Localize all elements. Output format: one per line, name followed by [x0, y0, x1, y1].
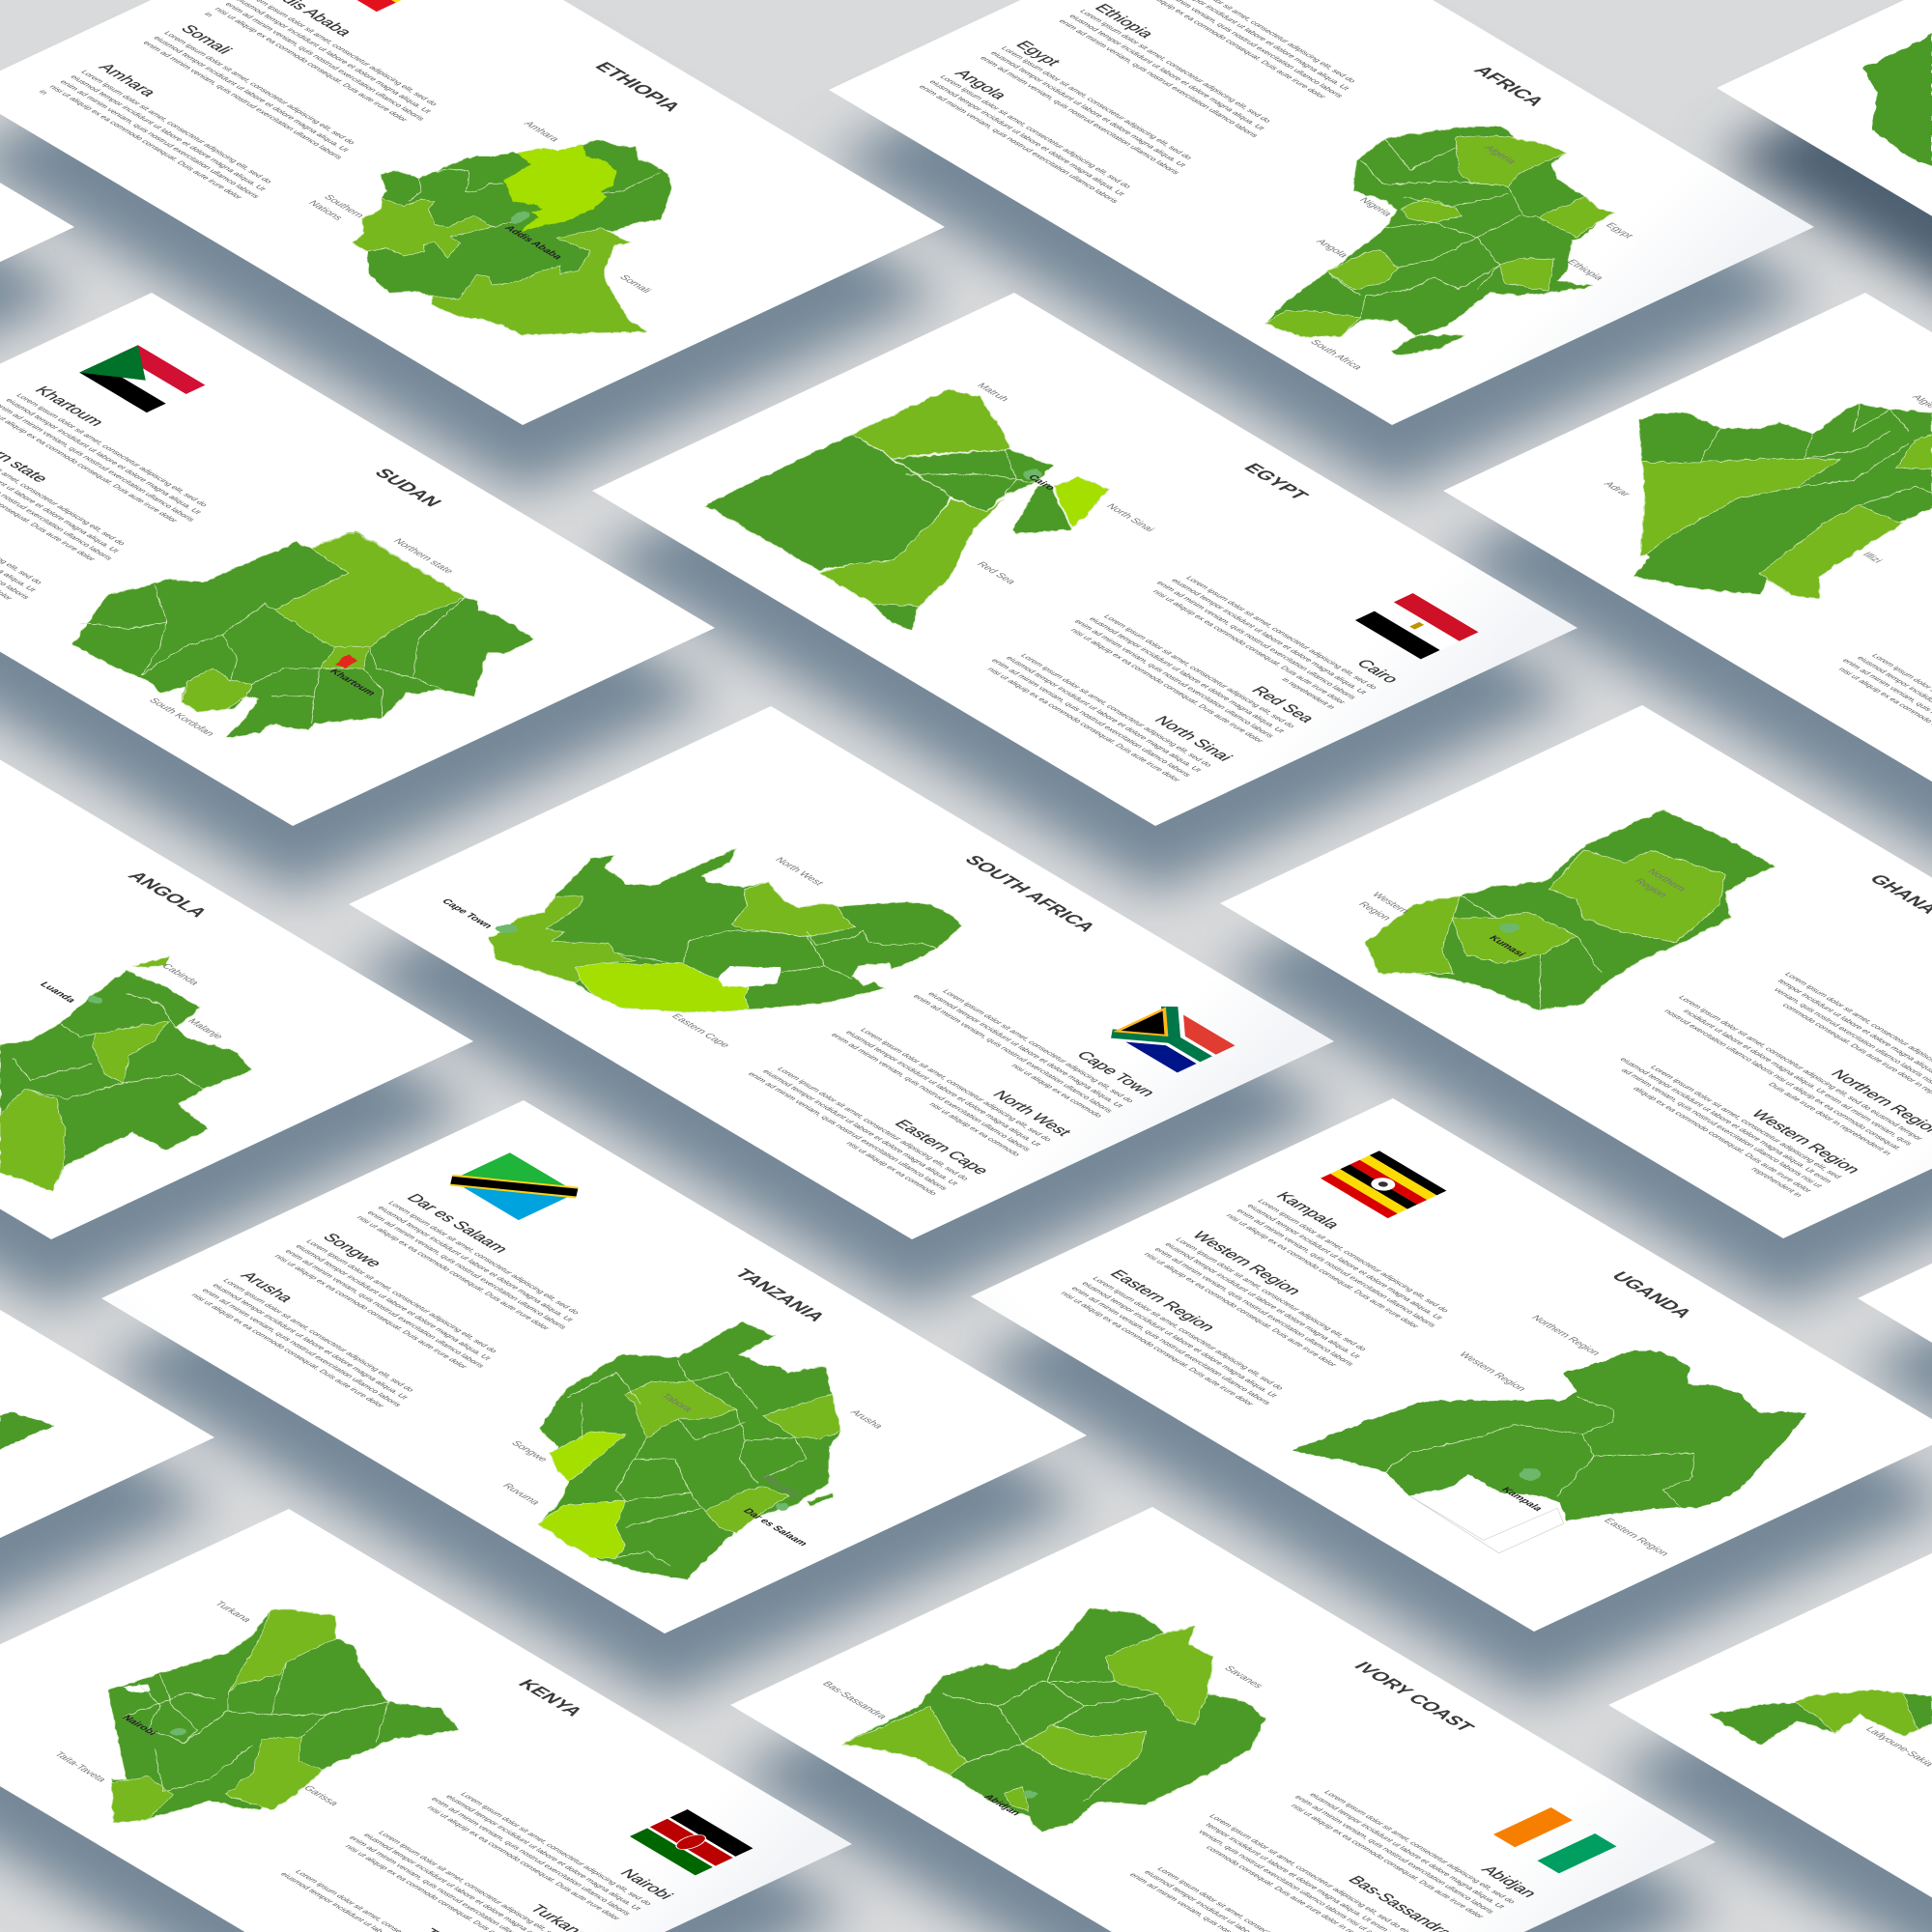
text: Africa: AFRICA: [1468, 64, 1548, 109]
map labels: Kenya: [51, 1601, 340, 1807]
text: Africa: [917, 0, 1548, 260]
panel: Ghana: [1220, 705, 1932, 1238]
map: Tanzania: [538, 1321, 841, 1579]
text: Ghana: [1528, 872, 1932, 1199]
text and flag: South Africa: Lorem ipsum dolor sit amet, consectetur adipiscing elit, sed do: [941, 988, 1136, 1104]
text and flag: Egypt: Lorem ipsum dolor sit amet, consectetur adipiscing elit, sed do: [1184, 575, 1379, 691]
text and flag: Kenya: Lorem ipsum dolor sit amet, consectetur adipiscing elit, sed do: [459, 1791, 654, 1907]
panel: partial slide top left: [0, 0, 74, 425]
map labels: South Africa: Eastern Cape: [668, 1013, 731, 1049]
text and flag: Uganda: UGANDA: [1606, 1269, 1696, 1321]
text and flag: Kenya: eiusmod tempor incididunt ut labore et dolore magna aliqua. Ut: [443, 1794, 644, 1912]
text and flag: Egypt: eiusmod tempor incididunt ut labore et dolore magna aliqua. Ut: [1169, 578, 1370, 696]
text: Ghana: Duis aute irure dolor in reprehenderit in: [1766, 1081, 1893, 1156]
map labels: Kenya: Garissa: [300, 1785, 340, 1807]
text: Africa: Lorem ipsum dolor sit amet, consectetur adipiscing elit, sed do: [938, 74, 1133, 189]
text and flag: Tanzania: nisi ut aliquip ex ea commodo consequat. Duis aute irure dolor: [355, 1215, 552, 1331]
text and flag: Ethiopia: Lorem ipsum dolor sit amet, consectetur adipiscing elit, sed do: [79, 70, 274, 185]
map labels: Angola: Malanje: [185, 1018, 225, 1040]
map: Ivory Coast: [842, 1608, 1265, 1833]
map: Ethiopia: [353, 139, 672, 335]
text and flag: Tanzania: TANZANIA: [729, 1266, 830, 1324]
text and flag: South Africa: Lorem ipsum dolor sit amet, consectetur adipiscing elit, sed do: [775, 1066, 971, 1181]
text: Algeria: [1830, 570, 1932, 783]
text and flag: Tanzania: eiusmod tempor incididunt ut labore et dolore magna aliqua. Ut: [376, 1205, 576, 1323]
text and flag: Tanzania: Lorem ipsum dolor sit amet, consectetur adipiscing elit, sed do: [221, 1278, 416, 1393]
map labels: Ethiopia: Somali: [616, 274, 653, 295]
text and flag: Kenya: KENYA: [513, 1677, 587, 1719]
text and flag: Ethiopia: in: [202, 12, 215, 18]
text: Ghana: incididunt ut labore et dolore magna aliqua. Ut enim ad minim veniam, quis: [1681, 1009, 1915, 1147]
text and flag: Tanzania: eiusmod tempor incididunt ut labore et dolore magna aliqua. Ut: [294, 1243, 494, 1362]
text and flag: Uganda: Kampala: [1272, 1190, 1345, 1231]
map: Uganda: [1293, 1351, 1807, 1520]
map labels: Ethiopia: Amhara: [521, 121, 561, 143]
text and flag: Uganda: Western Region: [1188, 1229, 1305, 1297]
map labels: Sudan: Northern state: [390, 538, 455, 575]
text and flag: Ivory Coast: IVORY COAST: [1349, 1660, 1479, 1734]
text and flag: Kenya: nisi ut aliquip ex ea commodo consequat. Duis aute irure dolor: [425, 1805, 623, 1921]
text: Africa: eiusmod tempor incididunt ut labore et dolore magna aliqua. Ut: [988, 50, 1189, 168]
text and flag: Ivory Coast: Abidjan: [1477, 1863, 1541, 1899]
text and flag: Tanzania: [189, 1136, 830, 1475]
text: Ghana: Western Region: [1747, 1108, 1864, 1176]
text: Africa: Angola: [951, 68, 1011, 101]
text and flag: Uganda: nisi ut aliquip ex ea commodo consequat. Duis aute irure dolor: [1059, 1291, 1256, 1406]
text and flag: Sudan: eiusmod tempor incididunt ut labore et dolore magna aliqua. Ut: [4, 397, 204, 516]
text and flag: South Africa: nisi ut aliquip ex ea commodo: [1009, 1063, 1104, 1119]
text and flag: South Africa: Eastern Cape: [891, 1118, 993, 1177]
map labels: Africa: Angola: [1313, 239, 1350, 259]
text and flag: Uganda: eiusmod tempor incididunt ut labore et dolore magna aliqua. Ut: [1080, 1281, 1280, 1399]
panel: Ethiopia: [0, 0, 945, 425]
text and flag: Ivory Coast: eiusmod tempor incididunt ut labore et dolore magna aliqua. Ut: [1307, 1792, 1508, 1910]
text and flag: South Africa: eiusmod tempor incididunt ut labore et dolore magna aliqua. Ut: [760, 1068, 961, 1186]
map labels: Uganda: Eastern Region: [1601, 1518, 1670, 1557]
map labels: Tanzania: Morogoro: [758, 1474, 806, 1500]
map: Ghana: [1365, 810, 1775, 1010]
text and flag: South Africa: enim ad minim veniam, quis nostrud exercitation ullamco laboris: [829, 1032, 1033, 1152]
panel: Angola: [0, 706, 473, 1239]
text and flag: South Africa: SOUTH AFRICA: [959, 853, 1100, 934]
text and flag: Egypt: EGYPT: [1238, 461, 1313, 502]
text and flag: Egypt: [909, 461, 1525, 784]
map labels: Algeria: Illizi: [1860, 552, 1884, 564]
text and flag: Kenya: enim ad minim veniam, quis nostrud exercitation ullamco laboris: [429, 1796, 633, 1917]
panel: South Africa: [349, 706, 1334, 1239]
map: Algeria: [1634, 404, 1932, 599]
text and flag: Ivory Coast: [1031, 1660, 1662, 1932]
panel: Ivory Coast: [730, 1507, 1716, 1932]
text and flag: Egypt: nisi ut aliquip ex ea commodo consequat. Duis aute irure dolor: [1068, 628, 1266, 744]
map labels: Angola: Luanda: [37, 981, 77, 1004]
text and flag: South Africa: North West: [988, 1089, 1076, 1138]
map labels: Ghana: Western: [1369, 892, 1411, 915]
panel: Kenya: [0, 1509, 852, 1932]
text: Africa: Lorem ipsum dolor sit amet, consectetur adipiscing elit, sed do: [1078, 9, 1273, 124]
text and flag: Uganda: Lorem ipsum dolor sit amet, consectetur adipiscing elit, sed do: [1091, 1276, 1286, 1391]
map: Africa: [1264, 127, 1613, 356]
text and flag: Ethiopia: eiusmod tempor incididunt ut labore et dolore magna aliqua. Ut: [152, 35, 352, 154]
map labels: Uganda: [1456, 1315, 1670, 1557]
text and flag: Tanzania: enim ad minim veniam, quis nostrud exercitation ullamco laboris: [200, 1288, 404, 1407]
map labels: Africa: [1307, 145, 1634, 371]
map labels: Ghana: Northern: [1644, 868, 1688, 893]
text and flag: Tanzania: Dar es Salaam: [403, 1192, 512, 1255]
lake outline: Uganda: [1409, 1496, 1564, 1553]
text and flag: Tanzania: nisi ut aliquip ex ea commodo consequat. Duis aute irure dolor: [272, 1253, 469, 1370]
text and flag: Uganda: Lorem ipsum dolor sit amet, consectetur adipiscing elit, sed do: [1256, 1198, 1451, 1314]
text and flag: Uganda: eiusmod tempor incididunt ut labore et dolore magna aliqua. Ut: [1163, 1241, 1363, 1360]
panel: partial slide top right: [1717, 0, 1932, 423]
map labels: Angola: [37, 963, 225, 1040]
text and flag: Kenya: Nairobi: [616, 1867, 677, 1901]
text: Ghana: aliquip ex ea commodo consequat. Duis aute irure dolor: [1631, 1086, 1814, 1194]
text and flag: Uganda: nisi ut aliquip ex ea commodo consequat. Duis aute irure dolor: [1224, 1213, 1421, 1329]
text and flag: Tanzania: enim ad minim veniam, quis nostrud exercitation ullamco laboris: [365, 1209, 569, 1330]
text and flag: Ethiopia: nisi ut aliquip ex ea commodo consequat. Duis aute irure dolor: [213, 7, 410, 123]
text and flag: South Africa: Lorem ipsum dolor sit amet, consectetur adipiscing elit, sed do: [858, 1027, 1054, 1143]
text and flag: Ivory Coast: enim ad minim veniam, quis nostrud exercitation ullamco laboris: [1293, 1794, 1496, 1915]
map labels: Africa: Egypt: [1603, 222, 1634, 240]
text and flag: South Africa: eiusmod tempor incididunt ut labore et dolore magna aliqua. Ut: [843, 1030, 1044, 1148]
map labels: Ivory Coast: Abidjan: [980, 1794, 1022, 1817]
map: partial lower left: [0, 1412, 54, 1450]
text: Africa: enim ad minim veniam, quis nostrud exercitation ullamco laboris: [978, 55, 1181, 176]
map labels: Algeria: [1601, 394, 1932, 564]
map labels: Sudan: South Kordofan: [146, 697, 216, 738]
text and flag: Uganda: [1059, 1134, 1696, 1471]
map labels: South Africa: Cape Town: [439, 898, 495, 929]
text and flag: Tanzania: Lorem ipsum dolor sit amet, consectetur adipiscing elit, sed do: [386, 1200, 582, 1316]
text and flag: Egypt: eiusmod tempor incididunt ut labore et dolore magna aliqua. Ut: [1087, 616, 1288, 734]
map labels: South Africa: [439, 857, 825, 1049]
panel: Tanzania: [101, 1100, 1087, 1634]
text and flag: Egypt: enim ad minim veniam, quis nostrud exercitation ullamco laboris: [1072, 618, 1276, 739]
text: Africa: Egypt: [1012, 39, 1065, 68]
map labels: Africa: Nigeria: [1356, 197, 1394, 217]
map labels: Uganda: Northern Region: [1528, 1315, 1602, 1357]
map: Western Sahara partial: [1709, 1690, 1932, 1746]
panel: partial slide lower left: [0, 1102, 214, 1635]
text and flag: South Africa: Cape Town: [1072, 1049, 1159, 1098]
map labels: Egypt: [974, 383, 1156, 585]
text and flag: Egypt: North Sinai: [1151, 714, 1236, 763]
text and flag: Sudan: Lorem ipsum dolor sit amet, consectetur adipiscing elit, sed do: [14, 392, 210, 508]
text and flag: Ethiopia: enim ad minim veniam, quis nostrud exercitation ullamco laboris: [58, 79, 262, 199]
map labels: Ivory Coast: [819, 1665, 1264, 1817]
text: Ghana: Lorem ipsum dolor sit amet, consectetur adipiscing elit, sed do eiusmod tempor: [1676, 995, 1925, 1142]
map labels: Egypt: Cairo: [1025, 474, 1057, 492]
text and flag: South Africa: [630, 853, 1282, 1197]
map labels: Angola: Cabinda: [158, 963, 201, 986]
map labels: Kenya: Nairobi: [119, 1715, 158, 1737]
text and flag: Tanzania: Songwe: [319, 1231, 386, 1269]
text and flag: Ethiopia: Lorem ipsum dolor sit amet, consectetur adipiscing elit, sed do: [162, 30, 357, 145]
text: Africa: enim ad minim veniam, quis nostrud exercitation ullamco laboris: [917, 84, 1121, 204]
panel: Algeria: [1443, 293, 1932, 826]
panel: Africa: [829, 0, 1814, 425]
text: Ghana: ad minim veniam, quis nostrud exercitation ullamco laboris nisi ut: [1619, 1067, 1825, 1189]
text and flag: Uganda: nisi ut aliquip ex ea commodo consequat. Duis aute irure dolor: [1142, 1251, 1339, 1368]
text and flag: South Africa: enim ad minim veniam, quis nostrud exercitation ullamco laboris: [746, 1071, 950, 1191]
map: Sudan: [72, 530, 535, 737]
text and flag: Ethiopia: enim ad minim veniam, quis nostrud exercitation ullamco laboris: [141, 40, 345, 160]
map labels: Ghana: [1355, 868, 1688, 958]
panel: partial slide bottom right: [1608, 1507, 1932, 1932]
panel: Sudan: [0, 293, 715, 826]
text and flag: Uganda: enim ad minim veniam, quis nostrud exercitation ullamco laboris: [1152, 1246, 1356, 1367]
text and flag: Sudan: Khartoum: [31, 384, 108, 428]
text and flag: Uganda: eiusmod tempor incididunt ut labore et dolore magna aliqua. Ut: [1245, 1203, 1445, 1321]
text and flag: Egypt: Lorem ipsum dolor sit amet, consectetur adipiscing elit, sed do: [1101, 613, 1297, 729]
text and flag: Ethiopia: [37, 0, 686, 270]
map labels: Africa: Algeria: [1481, 145, 1518, 165]
map labels: Africa: South Africa: [1307, 339, 1364, 371]
map labels: Tanzania: Dar es Salaam: [740, 1508, 810, 1548]
text: Ghana: nostrud exercitation ullamco laboris nisi ut aliquip ex ea commodo consequat.: [1662, 1009, 1904, 1151]
map: Egypt: [705, 389, 1109, 631]
text and flag: Tanzania: Lorem ipsum dolor sit amet, consectetur adipiscing elit, sed do: [304, 1238, 499, 1353]
text and flag: Uganda: enim ad minim veniam, quis nostrud exercitation ullamco laboris: [1235, 1208, 1438, 1328]
title: Angola: ANGOLA: [123, 869, 212, 920]
map: South Africa: [488, 848, 962, 1012]
map labels: Kenya: Taita-Taveta: [51, 1751, 108, 1783]
text and flag: Ethiopia: ETHIOPIA: [590, 60, 686, 114]
panel: Egypt: [592, 293, 1577, 826]
map labels: Sudan: [146, 538, 455, 738]
text and flag: Egypt: in reprehenderit in: [1280, 677, 1337, 710]
map labels: Ethiopia: Southern: [321, 194, 366, 219]
text and flag: Ethiopia: nisi ut aliquip ex ea commodo consequat. Duis aute irure dolor: [47, 84, 244, 200]
text and flag: Uganda: Eastern Region: [1106, 1267, 1220, 1333]
text and flag: South Africa: enim ad minim veniam, quis nostrud exercitation ullamco laboris: [911, 993, 1115, 1114]
text: Ghana: eiusmod tempor incididunt ut labore et dolore magna aliqua. Ut enim: [1618, 1057, 1834, 1184]
map labels: Egypt: Matruh: [974, 383, 1010, 403]
map labels: Uganda: Western Region: [1456, 1351, 1528, 1393]
text and flag: South Africa: nisi ut aliquip ex ea commodo: [844, 1141, 939, 1196]
text and flag: Ivory Coast: nisi ut aliquip ex ea commodo consequat. Duis aute irure dolor: [1289, 1804, 1487, 1919]
map labels: Tanzania: Arusha: [847, 1409, 885, 1430]
map labels: Ethiopia: [305, 121, 653, 295]
map labels: Tanzania: Tabora: [658, 1393, 695, 1413]
text and flag: Sudan: [0, 328, 446, 660]
text and flag: Egypt: nisi ut aliquip ex ea commodo consequat. Duis aute irure dolor: [985, 667, 1183, 782]
text and flag: Tanzania: enim ad minim veniam, quis nostrud exercitation ullamco laboris: [283, 1248, 487, 1369]
panel: Uganda: [971, 1098, 1932, 1632]
text and flag: Egypt: Lorem ipsum dolor sit amet, consectetur adipiscing elit, sed do: [1018, 653, 1214, 768]
map labels: Ivory Coast: Savanes: [1221, 1665, 1264, 1690]
text: Africa: Lorem ipsum dolor sit amet, consectetur adipiscing elit, sed do: [999, 45, 1194, 160]
text and flag: Sudan: SUDAN: [369, 467, 446, 509]
map labels: Algeria: Adrar: [1601, 481, 1633, 498]
map: Angola: [0, 956, 251, 1191]
map labels: Tanzania: Songwe: [508, 1440, 550, 1463]
text and flag: South Africa: eiusmod tempor incididunt ut labore et dolore magna aliqua. Ut: [925, 991, 1126, 1109]
text and flag: Ethiopia: Somali: [177, 22, 237, 56]
text and flag: Tanzania: nisi ut aliquip ex ea commodo consequat. Duis aute irure dolor: [189, 1293, 386, 1408]
text and flag: South Africa: nisi ut aliquip ex ea commodo: [927, 1101, 1022, 1157]
map: Kenya: [108, 1610, 459, 1824]
map labels: Tanzania: [499, 1393, 885, 1548]
map: top right partial: [1862, 34, 1932, 166]
map labels: Ghana: Region: [1632, 878, 1669, 898]
map labels: Egypt: North Sinai: [1103, 503, 1156, 533]
map labels: Ivory Coast: Bas-Sassandra: [819, 1681, 889, 1720]
text and flag: Ethiopia: enim ad minim veniam, quis nostrud exercitation ullamco laboris: [223, 1, 427, 122]
text and flag: Tanzania: eiusmod tempor incididunt ut labore et dolore magna aliqua. Ut: [211, 1283, 411, 1401]
text: Ghana: Lorem ipsum dolor sit amet, consectetur adipiscing elit, sed: [1648, 1065, 1844, 1179]
text: Africa: eiusmod tempor incididunt ut labore et dolore magna aliqua. Ut: [1067, 14, 1267, 131]
map labels: Tanzania: Ruvuma: [499, 1483, 542, 1506]
text and flag: Egypt: nisi ut aliquip ex ea commodo consequat. Duis aute irure dolor: [1151, 589, 1349, 705]
text and flag: Kenya: [205, 1677, 800, 1932]
map labels: South Africa: North West: [772, 857, 825, 887]
map labels: Kenya: Turkana: [212, 1601, 253, 1624]
text: Africa: eiusmod tempor incididunt ut labore et dolore magna aliqua. Ut: [927, 79, 1127, 197]
text and flag: Ivory Coast: Lorem ipsum dolor sit amet, consectetur adipiscing elit, sed do: [1322, 1789, 1518, 1905]
map labels: Sudan: Khartoum: [327, 668, 378, 697]
text and flag: Tanzania: Arusha: [237, 1269, 298, 1304]
map labels: Ghana: Kumasi: [1486, 935, 1527, 958]
map labels: Africa: Ethiopia: [1564, 259, 1605, 282]
text and flag: Egypt: Cairo: [1352, 657, 1403, 685]
map labels: Ethiopia: Nations: [305, 200, 345, 221]
text and flag: Uganda: enim ad minim veniam, quis nostrud exercitation ullamco laboris: [1069, 1286, 1273, 1406]
text and flag: Ethiopia: Amhara: [95, 61, 161, 99]
text: Africa: Ethiopia: [1091, 2, 1158, 41]
map labels: Egypt: Red Sea: [974, 561, 1017, 585]
map labels: Ghana: Region: [1355, 901, 1393, 922]
text and flag: Uganda: Lorem ipsum dolor sit amet, consectetur adipiscing elit, sed do: [1174, 1236, 1369, 1351]
text: Ghana: reprehenderit in: [1749, 1166, 1804, 1198]
text and flag: Ethiopia: eiusmod tempor incididunt ut labore et dolore magna aliqua. Ut: [69, 74, 269, 192]
text and flag: Egypt: Red Sea: [1247, 684, 1320, 724]
text: Africa: enim ad minim veniam, quis nostrud exercitation ullamco laboris: [1057, 18, 1261, 138]
map labels: Uganda: Kampala: [1498, 1487, 1545, 1513]
text and flag: Egypt: enim ad minim veniam, quis nostrud exercitation ullamco laboris: [1154, 580, 1358, 700]
text and flag: Egypt: enim ad minim veniam, quis nostrud exercitation ullamco laboris: [989, 658, 1193, 778]
panel: partial slide right: [1858, 1100, 1932, 1634]
text and flag: Ethiopia: in: [37, 89, 50, 96]
text and flag: Egypt: eiusmod tempor incididunt ut labore et dolore magna aliqua. Ut: [1004, 655, 1205, 773]
map labels: Ethiopia: Addis Ababa: [501, 225, 564, 261]
